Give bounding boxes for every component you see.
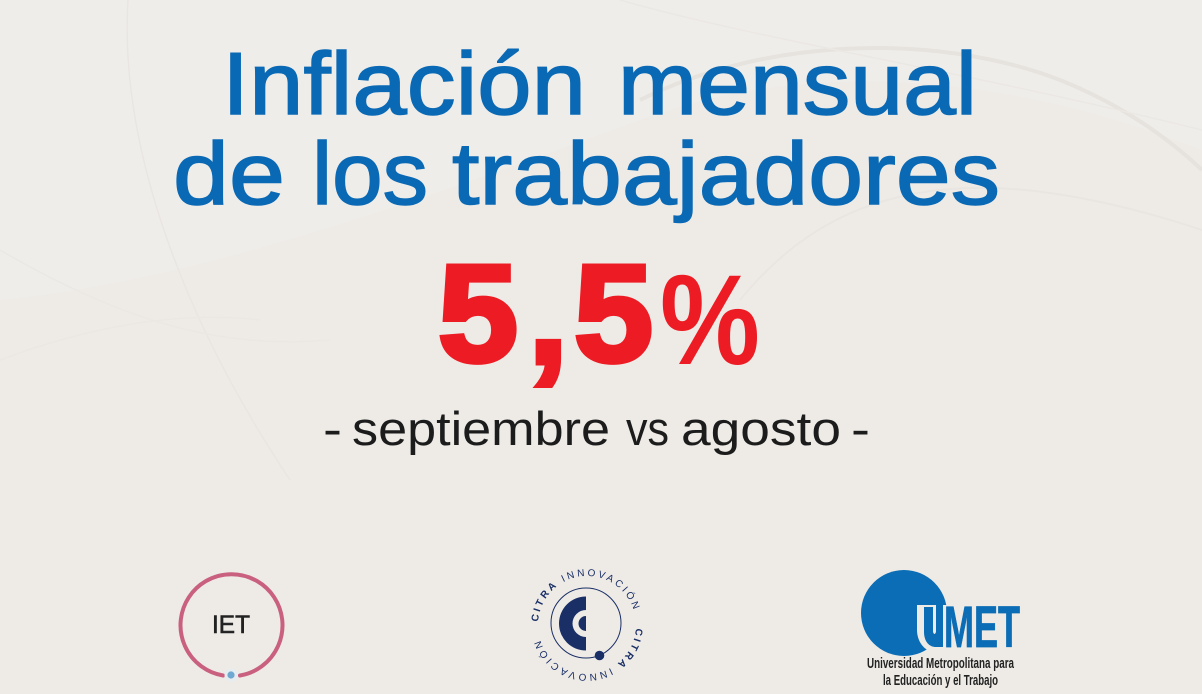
title: de xyxy=(173,124,285,223)
logo: IET xyxy=(181,574,282,682)
headline value: 5,5% xyxy=(438,232,760,394)
subtitle: - xyxy=(851,402,870,455)
subtitle: - xyxy=(323,402,342,455)
title: los xyxy=(312,124,428,223)
title xyxy=(173,34,1000,223)
headline value: 5,5%: % xyxy=(660,249,760,392)
logo: CITRA Innovación xyxy=(532,569,642,681)
logo: CITRA Innovación: CITRA INNOVACIÓN xyxy=(534,629,642,681)
logo: CITRA Innovación: CITRA INNOVACIÓN xyxy=(532,569,640,621)
logo: UMET xyxy=(861,570,1022,689)
subtitle: vs xyxy=(626,402,669,455)
headline value: 5,5%: , xyxy=(528,232,568,394)
title: Inflación xyxy=(222,34,586,133)
subtitle xyxy=(323,402,870,455)
subtitle: agosto xyxy=(681,402,841,455)
title: mensual xyxy=(618,34,977,133)
headline value: 5,5%: 5 xyxy=(438,237,518,391)
logo: UMET: Universidad Metropolitana para xyxy=(867,656,1015,672)
logo: UMET: la Educación y el Trabajo xyxy=(883,673,998,689)
title: trabajadores xyxy=(452,124,1000,223)
logo: UMET: MET xyxy=(944,595,1020,660)
headline value: 5,5%: 5 xyxy=(574,237,653,391)
subtitle: septiembre xyxy=(352,402,610,455)
logo: IET: IET xyxy=(212,611,250,639)
